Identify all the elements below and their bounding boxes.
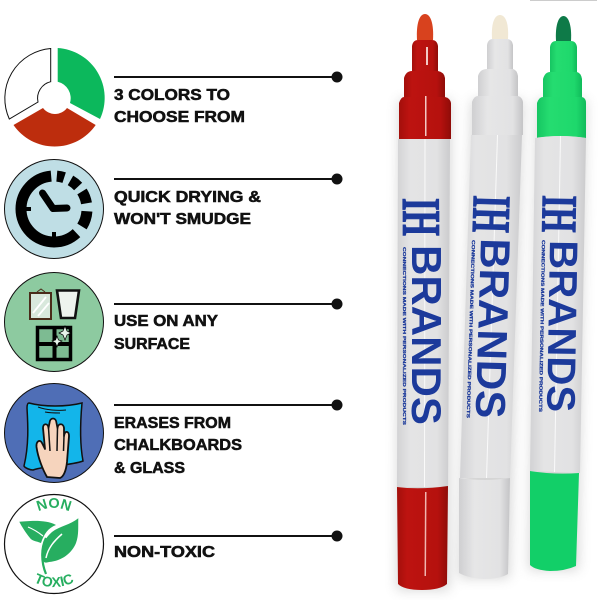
text: quick drying and won't smudge: WON'T SMUDGE bbox=[114, 211, 251, 228]
text: erases from chalkboards and glass: & GLASS bbox=[114, 460, 185, 477]
text: use on any surface: USE ON ANY bbox=[114, 313, 219, 330]
logo: IH BRANDS on red marker: IH bbox=[391, 198, 451, 236]
icon: three colors wheel bbox=[5, 48, 105, 147]
logo: IH BRANDS on white marker: CONNECTIONS MADE WITH PERSONALIZED PRODUCTS bbox=[466, 240, 476, 418]
connector: drying bbox=[114, 174, 342, 184]
text: erases from chalkboards and glass: CHALKBOARDS bbox=[114, 437, 242, 454]
connector: colors bbox=[114, 72, 342, 82]
logo: IH BRANDS on red marker bbox=[391, 198, 451, 425]
text: use on any surface bbox=[114, 313, 219, 353]
connector: non-toxic bbox=[114, 530, 342, 542]
red marker bbox=[391, 14, 451, 590]
logo: IH BRANDS on white marker: BRANDS bbox=[467, 238, 519, 419]
text: erases from chalkboards and glass: ERASES FROM bbox=[114, 415, 231, 432]
logo: IH BRANDS on red marker: BRANDS bbox=[403, 245, 450, 425]
logo: IH BRANDS on green marker: BRANDS bbox=[538, 240, 585, 413]
icon: non-toxic leaves: TOXIC bbox=[36, 573, 74, 588]
logo: IH BRANDS on white marker: IH bbox=[461, 195, 522, 233]
text: erases from chalkboards and glass bbox=[114, 415, 242, 477]
text: use on any surface: SURFACE bbox=[114, 336, 190, 353]
logo: IH BRANDS on green marker: IH bbox=[531, 195, 588, 233]
text: quick drying and won't smudge bbox=[114, 189, 261, 228]
icon: non-toxic leaves bbox=[4, 494, 104, 594]
text: non-toxic: NON-TOXIC bbox=[114, 544, 215, 561]
green marker bbox=[530, 16, 588, 571]
connector: surface bbox=[114, 298, 342, 310]
icon: erase with cloth and hand bbox=[4, 384, 104, 482]
icon: non-toxic leaves: NON bbox=[36, 498, 72, 511]
logo: IH BRANDS on white marker bbox=[461, 195, 522, 419]
icon: quick drying clock bbox=[4, 160, 104, 258]
connector: erases bbox=[114, 400, 342, 410]
white marker bbox=[459, 15, 523, 579]
top edge fragment bbox=[530, 0, 597, 1]
text: 3 colors to choose from: 3 COLORS TO bbox=[114, 87, 230, 104]
text: 3 colors to choose from bbox=[114, 87, 245, 126]
icon: use on any surface bbox=[4, 272, 104, 372]
logo: IH BRANDS on green marker: CONNECTIONS MADE WITH PERSONALIZED PRODUCTS bbox=[538, 240, 546, 412]
text: quick drying and won't smudge: QUICK DRYING & bbox=[114, 189, 261, 206]
text: 3 colors to choose from: CHOOSE FROM bbox=[114, 109, 245, 126]
marker shadows bbox=[397, 100, 586, 590]
logo: IH BRANDS on green marker bbox=[531, 195, 588, 413]
logo: IH BRANDS on red marker: CONNECTIONS MADE WITH PERSONALIZED PRODUCTS bbox=[402, 247, 407, 425]
